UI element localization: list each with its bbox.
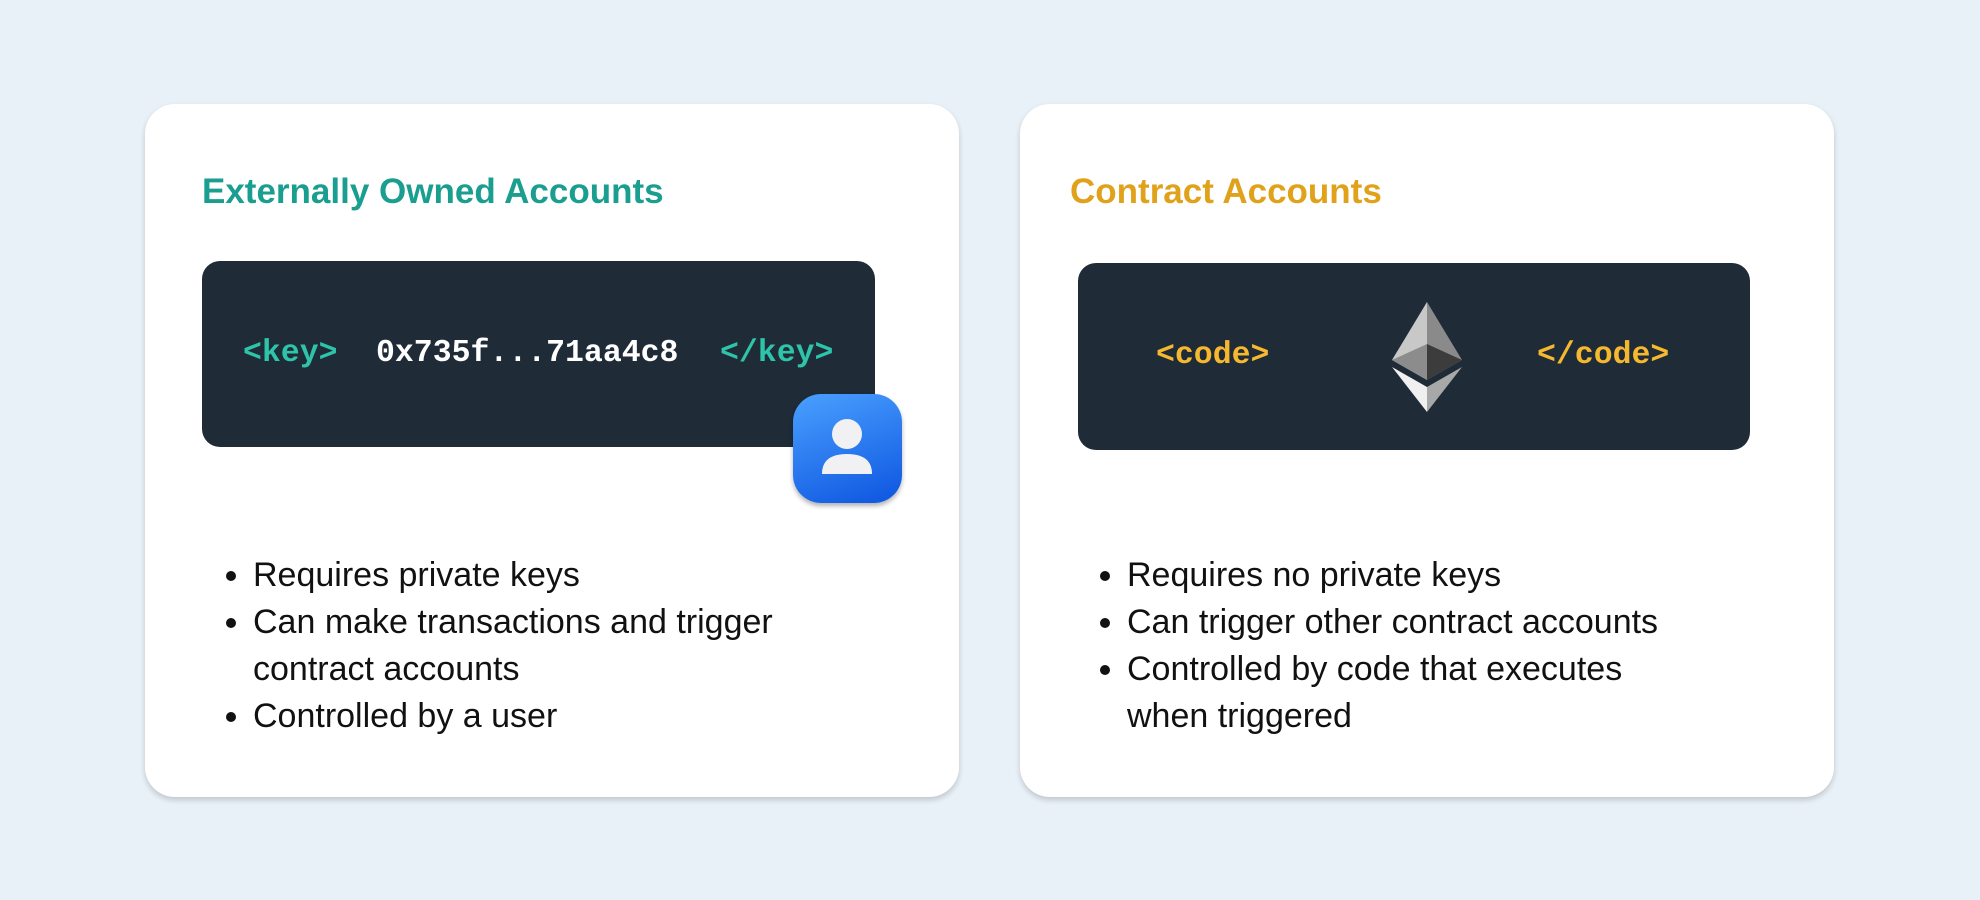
bullet list: contract: Controlled by code that executes when triggered [1127, 650, 1622, 735]
icon: user [793, 394, 902, 503]
panel: contract accounts [1020, 104, 1834, 797]
bullet list: EOA [226, 556, 773, 735]
panel: externally owned accounts [145, 104, 959, 797]
bullet list: EOA: Requires private keys [253, 556, 580, 594]
code text: key: <key> [243, 336, 338, 371]
title: EOA: Externally Owned Accounts [202, 172, 664, 211]
code text: address: 0x735f...71aa4c8 [376, 336, 678, 371]
code text: code: <code> [1156, 338, 1269, 373]
code box: key [202, 261, 875, 447]
code box: code [1078, 263, 1750, 450]
bullet list: contract: Can trigger other contract accounts [1127, 603, 1658, 641]
bullet list: EOA: Can make transactions and trigger contract accounts [253, 603, 773, 688]
bullet list: contract [1100, 556, 1658, 735]
icon: ethereum [1392, 302, 1462, 412]
bullet list: EOA: Controlled by a user [253, 697, 557, 735]
code text: close key: </key> [720, 336, 833, 371]
code text: close code: </code> [1537, 338, 1669, 373]
bullet list: contract: Requires no private keys [1127, 556, 1501, 594]
title: contract accounts: Contract Accounts [1070, 172, 1382, 211]
